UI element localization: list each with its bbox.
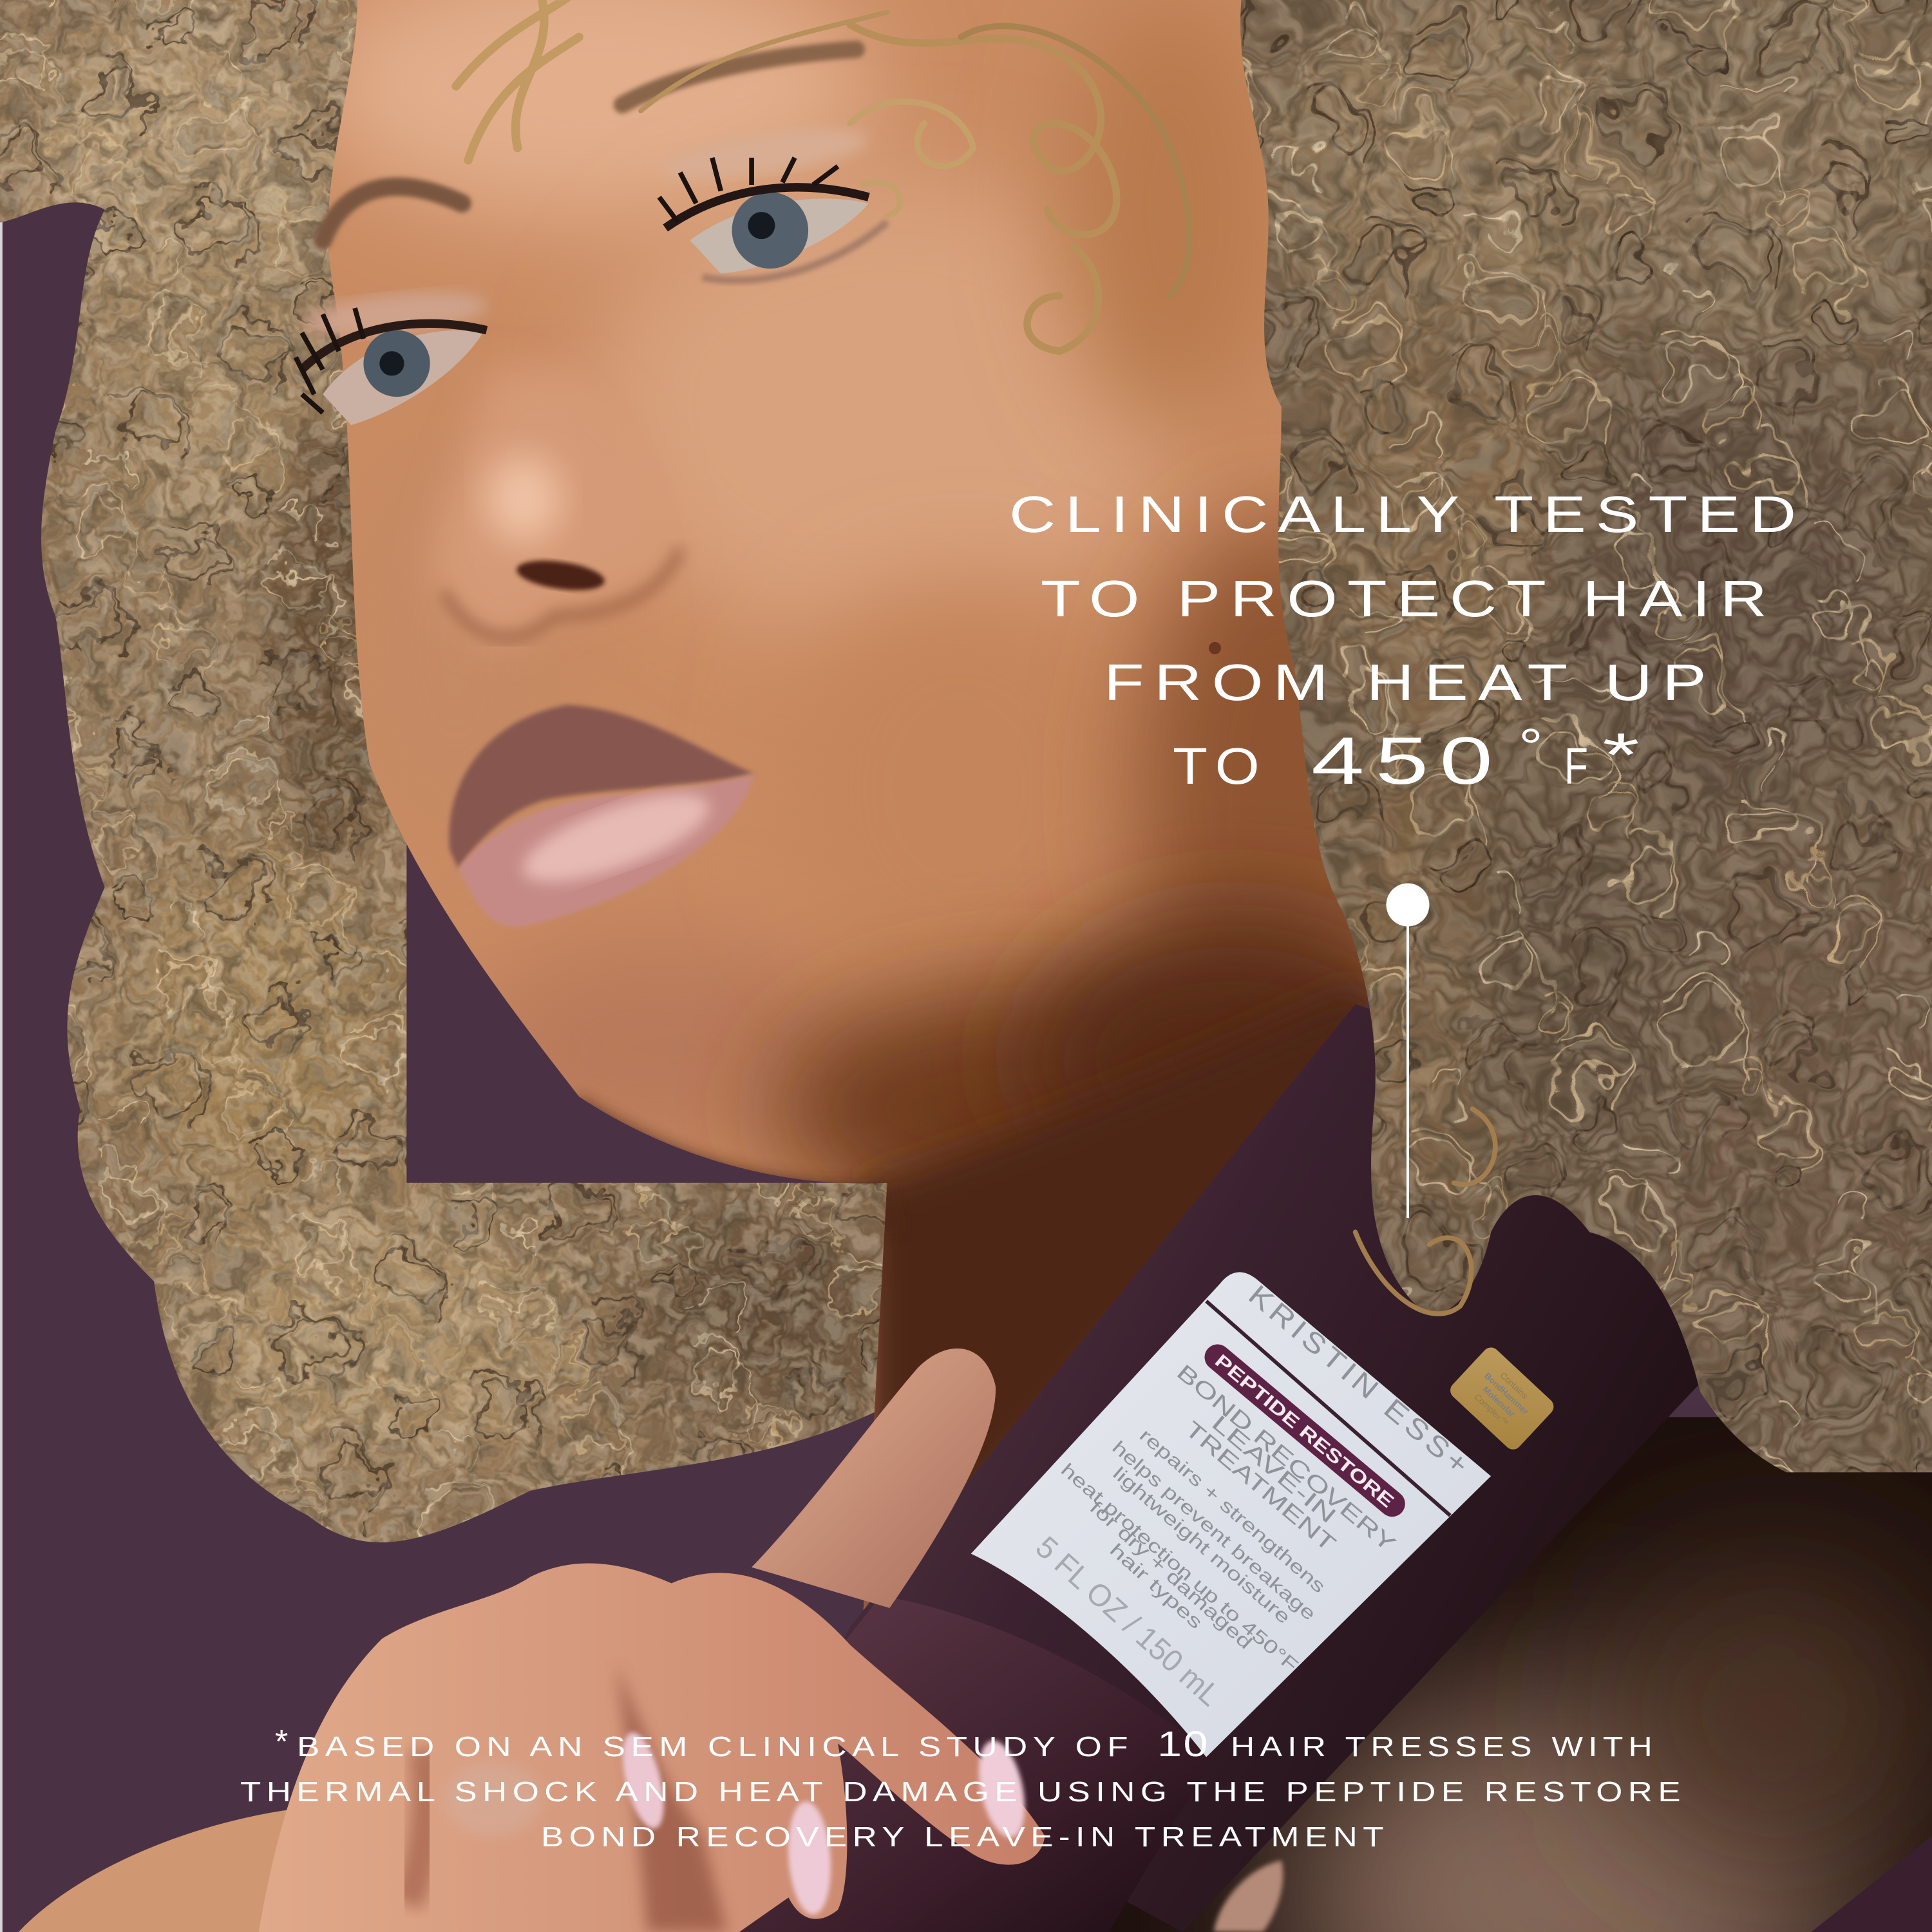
headline: FROM HEAT UP (1104, 654, 1716, 711)
headline: F (1564, 737, 1594, 795)
gold sticker: Contains (1499, 1370, 1530, 1401)
product benefits: hair types (1106, 1540, 1206, 1633)
footnote (240, 1723, 1686, 1853)
footnote: 10 (1157, 1723, 1209, 1764)
product benefits: heat protection up to 450°F (1057, 1459, 1302, 1676)
tube cap (739, 1596, 1214, 1932)
footnote: BOND RECOVERY LEAVE-IN TREATMENT (541, 1821, 1389, 1853)
callout pointer line (1386, 884, 1430, 1218)
product pill: PEPTIDE RESTORE (1211, 1350, 1397, 1512)
headline: TO PROTECT HAIR (1041, 570, 1777, 627)
headline: * (1602, 721, 1640, 790)
brand name: KRISTIN ESS+ (1242, 1279, 1478, 1484)
product benefits: lightweight moisture (1109, 1463, 1294, 1628)
product benefits (1057, 1425, 1329, 1676)
fingernails (614, 1728, 672, 1832)
headline: 450 (1311, 724, 1504, 799)
product name (1172, 1360, 1400, 1557)
product pill (1199, 1339, 1410, 1522)
gold sticker: BondHammer (1482, 1371, 1530, 1416)
eyebrows (323, 50, 857, 240)
gold sticker: Molecular (1481, 1385, 1517, 1419)
headline: CLINICALLY TESTED (1009, 486, 1806, 543)
hand: fingers (259, 1564, 1045, 1932)
footnote: THERMAL SHOCK AND HEAT DAMAGE USING THE PEPTIDE RESTORE (240, 1776, 1686, 1808)
shoulder, lower left (19, 1809, 370, 1932)
gold sticker (1447, 1344, 1557, 1453)
footnote: BASED ON AN SEM CLINICAL STUDY OF (297, 1731, 1133, 1763)
left edge highlight (0, 0, 3, 1932)
product benefits: for dry + damaged (1086, 1497, 1256, 1653)
mole (1209, 642, 1221, 654)
face and neck (308, 0, 1442, 1639)
hair: forehead curls (456, 0, 1189, 351)
footnote: * (275, 1723, 288, 1761)
product name: BOND RECOVERY (1172, 1360, 1400, 1557)
headline: TO (1173, 737, 1268, 795)
hair: left mass (0, 0, 961, 1577)
nose (431, 370, 680, 643)
footnote: HAIR TRESSES WITH (1231, 1731, 1658, 1763)
hair: loose curls over tube (1356, 1109, 1495, 1314)
eye, right (658, 120, 887, 280)
product benefits: repairs + strengthens (1135, 1425, 1329, 1597)
hand: lower finger (1214, 1861, 1283, 1932)
headline: ° (1519, 718, 1543, 775)
lips (449, 705, 754, 927)
product name: LEAVE-IN (1207, 1410, 1341, 1528)
eye, left (296, 285, 488, 425)
label divider (1206, 1301, 1450, 1515)
product benefits: helps prevent breakage (1108, 1437, 1320, 1625)
hair: right mass (1208, 0, 1932, 1503)
product label (971, 1272, 1491, 1757)
hand: thumb (752, 1349, 996, 1608)
product name: TREATMENT (1180, 1417, 1340, 1557)
headline (1009, 486, 1806, 799)
product size: 5 FL OZ / 150 mL (1029, 1530, 1227, 1713)
gold sticker: Complex™ (1472, 1392, 1510, 1428)
shoulder and body, lower right (1109, 1417, 1932, 1932)
tube body (801, 1004, 1750, 1932)
